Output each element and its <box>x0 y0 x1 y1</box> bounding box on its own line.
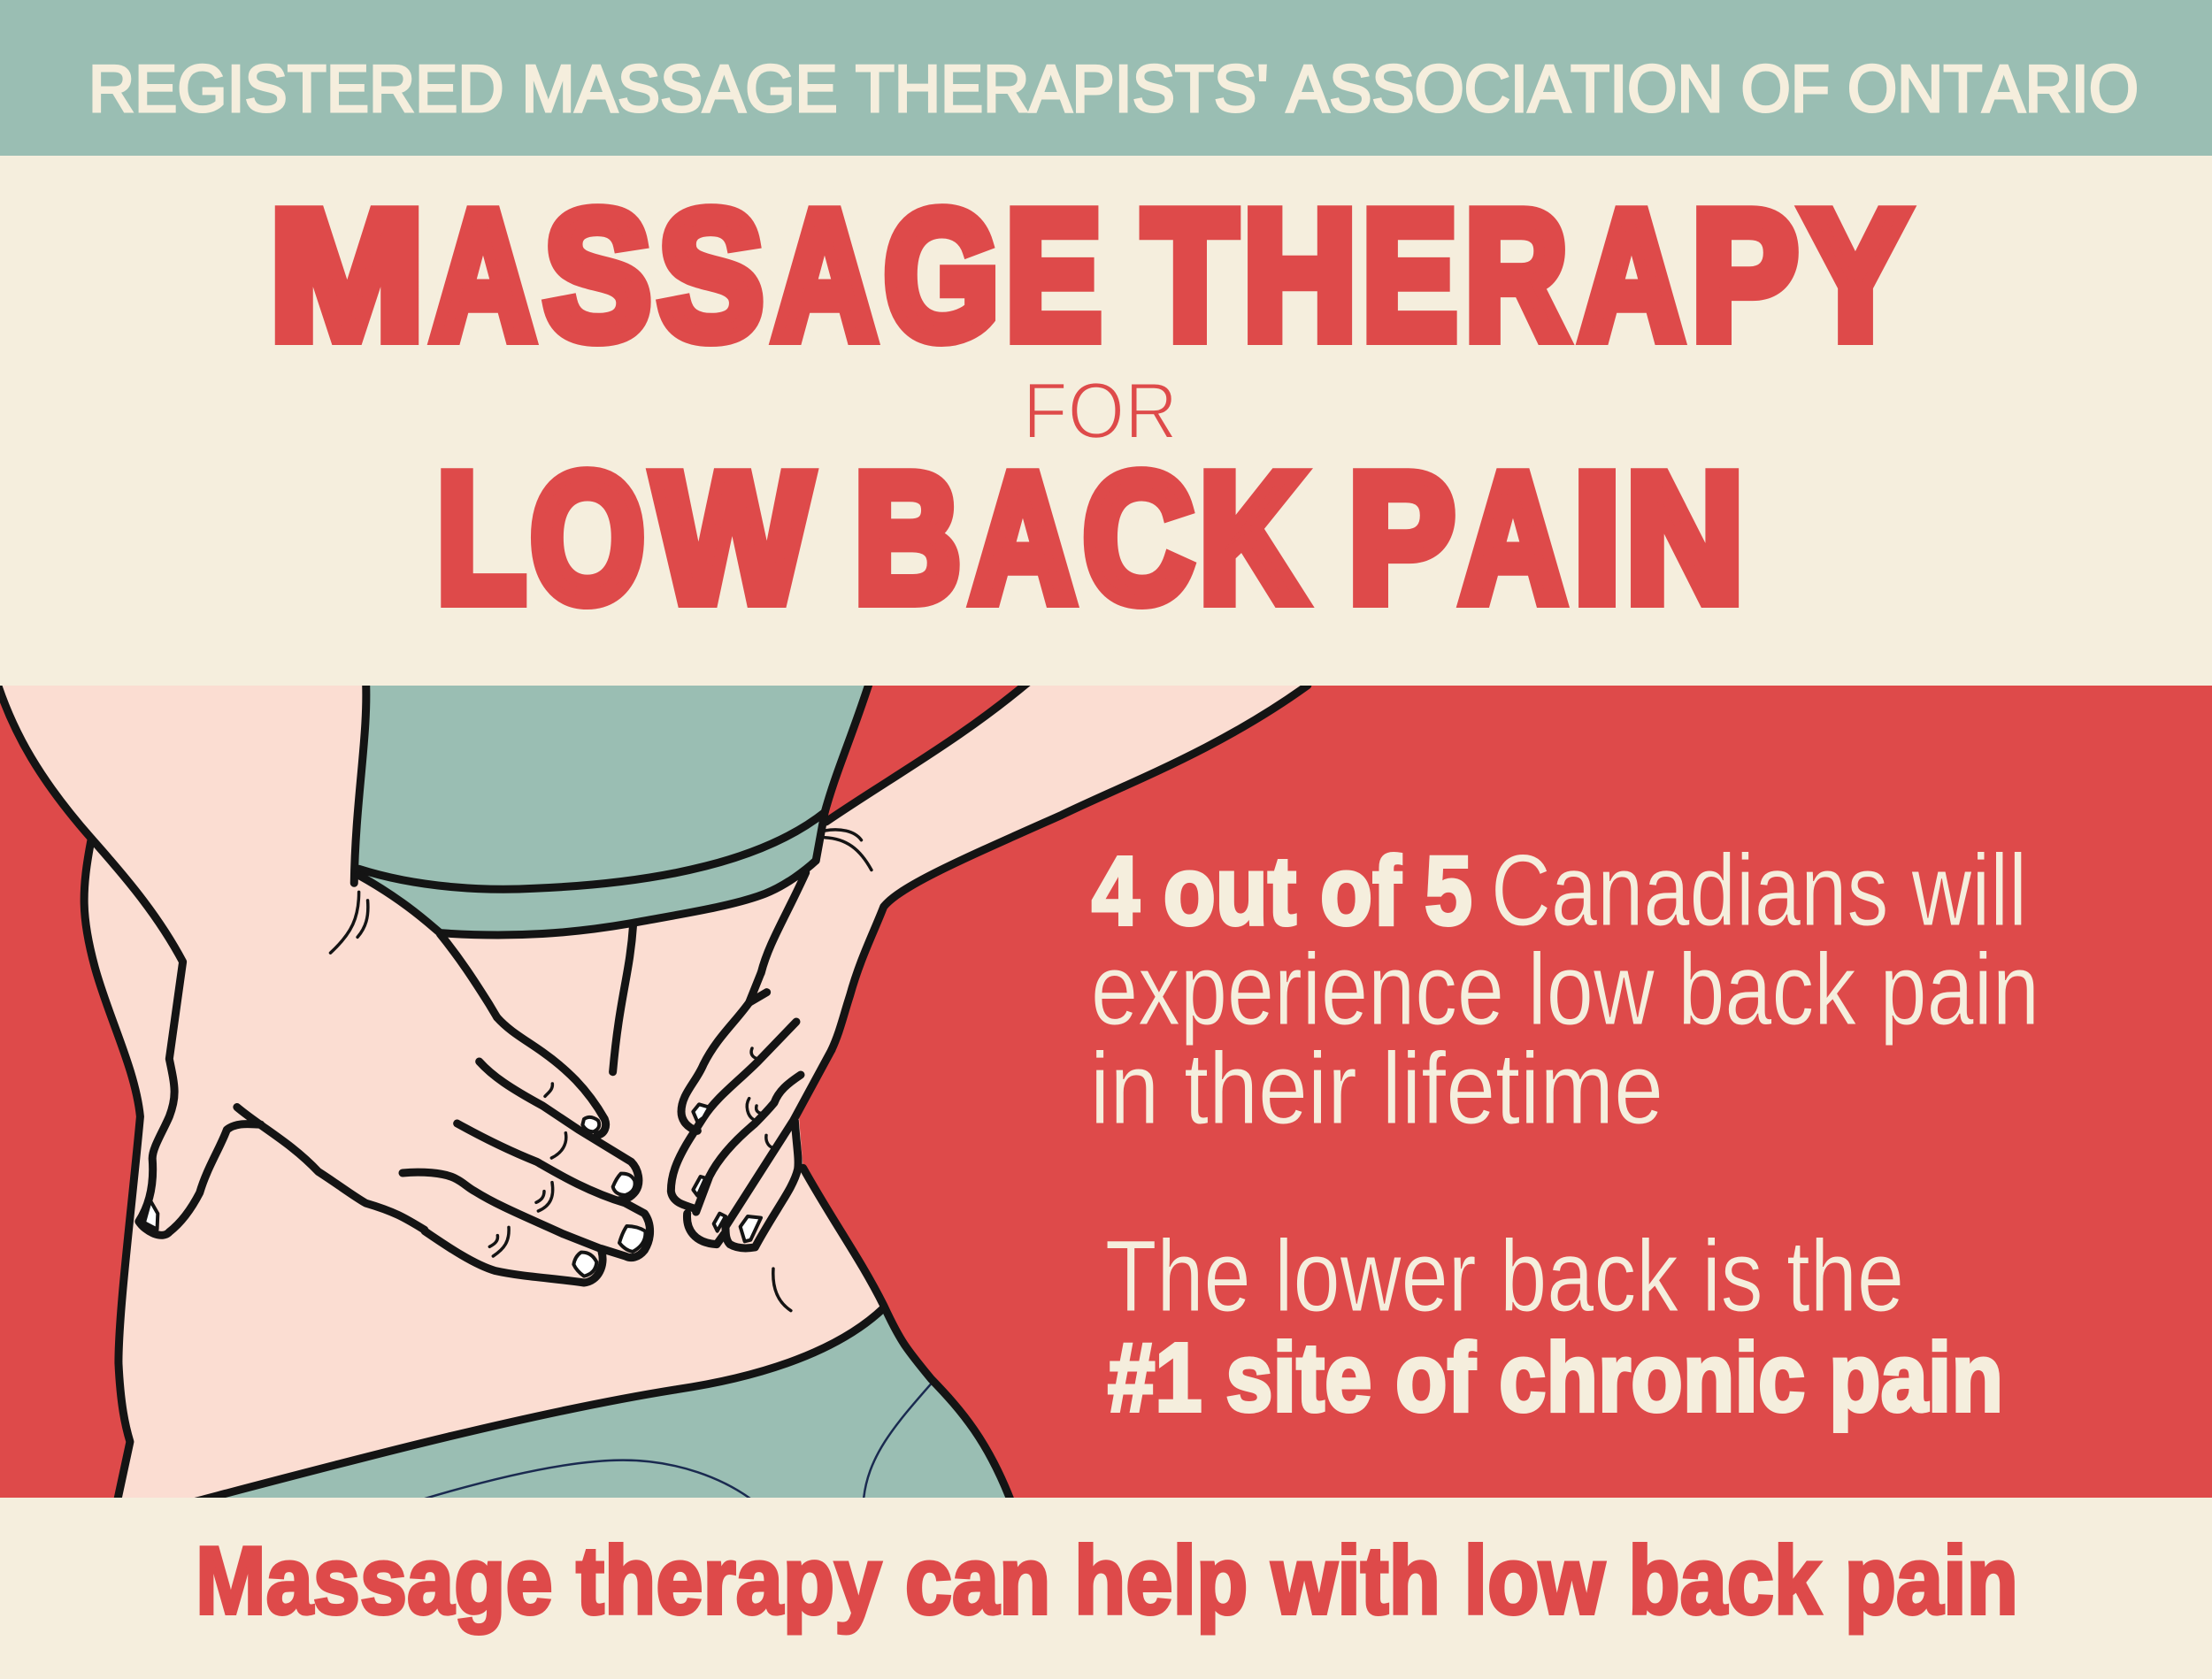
shirt <box>357 676 872 935</box>
title line: massage therapy: M <box>270 173 424 377</box>
left hand fingers <box>403 1017 650 1283</box>
statistic: 4 out of 5: experience low back pain <box>1091 933 2039 1046</box>
illustration: hands on lower back <box>0 676 1308 1505</box>
creases near shoulder and wrist <box>330 892 359 953</box>
body outlines <box>0 681 261 1235</box>
upper arm line <box>826 678 1033 822</box>
title line: massage therapy: A <box>432 173 534 377</box>
title line: massage therapy: G <box>884 173 999 377</box>
title line: low back pain: A <box>971 436 1075 640</box>
title line: low back pain: A <box>1461 436 1565 640</box>
title line: low back pain: P <box>1348 436 1455 640</box>
statistic: 4 out of 5: 4 out of 5 <box>1092 837 1472 946</box>
title line: low back pain: I <box>1574 436 1620 640</box>
statistic: number one site of chronic pain: The lower back is the <box>1105 1220 1904 1333</box>
right wrist line <box>761 872 806 973</box>
spine line <box>613 925 634 1072</box>
statistic: number one site of chronic pain: #1 site of chronic pain <box>1108 1323 2003 1432</box>
title line: low back pain: O <box>531 436 644 640</box>
title <box>270 173 1909 640</box>
thumb nail <box>144 1200 157 1230</box>
header: association name: REGISTERED MASSAGE THERAPISTS' ASSOCIATION OF ONTARIO <box>88 51 2139 126</box>
title line: massage therapy: E <box>1006 173 1102 377</box>
statistic: 4 out of 5: Canadians will <box>1491 834 2027 947</box>
title word: for: FOR <box>1023 367 1178 456</box>
title line: massage therapy: E <box>1363 173 1457 377</box>
title line: massage therapy: S <box>658 173 764 377</box>
header band <box>0 0 2212 156</box>
right hand fingers <box>671 973 832 1248</box>
statistic: 4 out of 5 <box>1090 834 2039 1146</box>
statistic: 4 out of 5: in their lifetime <box>1090 1032 1663 1146</box>
red gap between shirt and arm <box>828 686 1018 816</box>
title line: massage therapy: H <box>1243 173 1356 377</box>
title line: low back pain: W <box>654 436 811 640</box>
title line: massage therapy: A <box>773 173 876 377</box>
title line: massage therapy: Y <box>1802 173 1909 377</box>
underwear <box>226 1314 1005 1498</box>
title line: massage therapy: P <box>1692 173 1798 377</box>
left hand upper outline <box>237 1108 425 1230</box>
panel: red illustration band <box>0 686 2212 1498</box>
title line: low back pain: N <box>1626 436 1743 640</box>
body and arms skin <box>0 676 1308 1505</box>
title line: low back pain: K <box>1200 436 1304 640</box>
title line: massage therapy: A <box>1580 173 1683 377</box>
title line: massage therapy: R <box>1465 173 1568 377</box>
title line: low back pain: C <box>1083 436 1193 640</box>
shirt lines <box>354 676 366 883</box>
title line: low back pain: L <box>437 436 526 640</box>
title line: massage therapy: T <box>1143 173 1237 377</box>
statistic: number one site of chronic pain <box>1105 1220 2003 1432</box>
title line: massage therapy: S <box>544 173 651 377</box>
title line: low back pain: B <box>855 436 961 640</box>
